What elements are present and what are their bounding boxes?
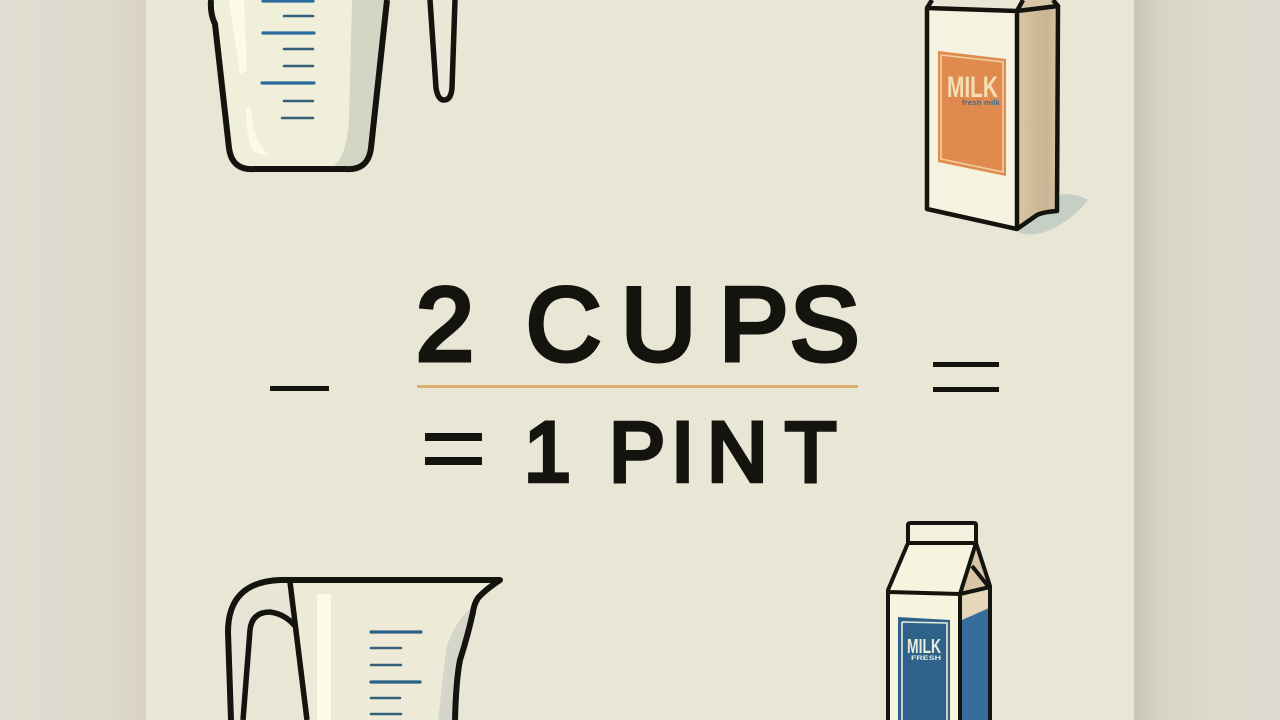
carton label: fresh milk <box>962 100 1000 107</box>
measuring ticks <box>371 632 421 714</box>
decorative minus sign left <box>270 386 329 391</box>
icon: milk carton bottom right <box>888 523 990 720</box>
central poster panel <box>146 0 1134 720</box>
background left margin <box>0 0 146 720</box>
carton shadow <box>1018 194 1088 235</box>
carton label: MILK <box>907 636 941 658</box>
carton label <box>898 617 950 720</box>
equals sign <box>425 433 482 465</box>
icon: measuring cup bottom left <box>228 580 500 720</box>
heading: 1 pint: 1 PINT <box>0 405 836 499</box>
measuring ticks <box>262 1 314 118</box>
heading: 2 cups: 2 CUPS <box>0 267 859 383</box>
background right margin <box>1134 0 1280 720</box>
cup handle <box>430 0 455 100</box>
decorative equals sign right <box>933 362 999 392</box>
fraction rule <box>417 385 858 388</box>
icon: measuring cup top left <box>211 0 455 171</box>
cup handle inner <box>243 612 295 720</box>
carton label: FRESH <box>911 656 941 662</box>
carton label: MILK <box>947 71 998 104</box>
icon: paper carton top right <box>927 0 1088 235</box>
carton label <box>938 51 1006 176</box>
